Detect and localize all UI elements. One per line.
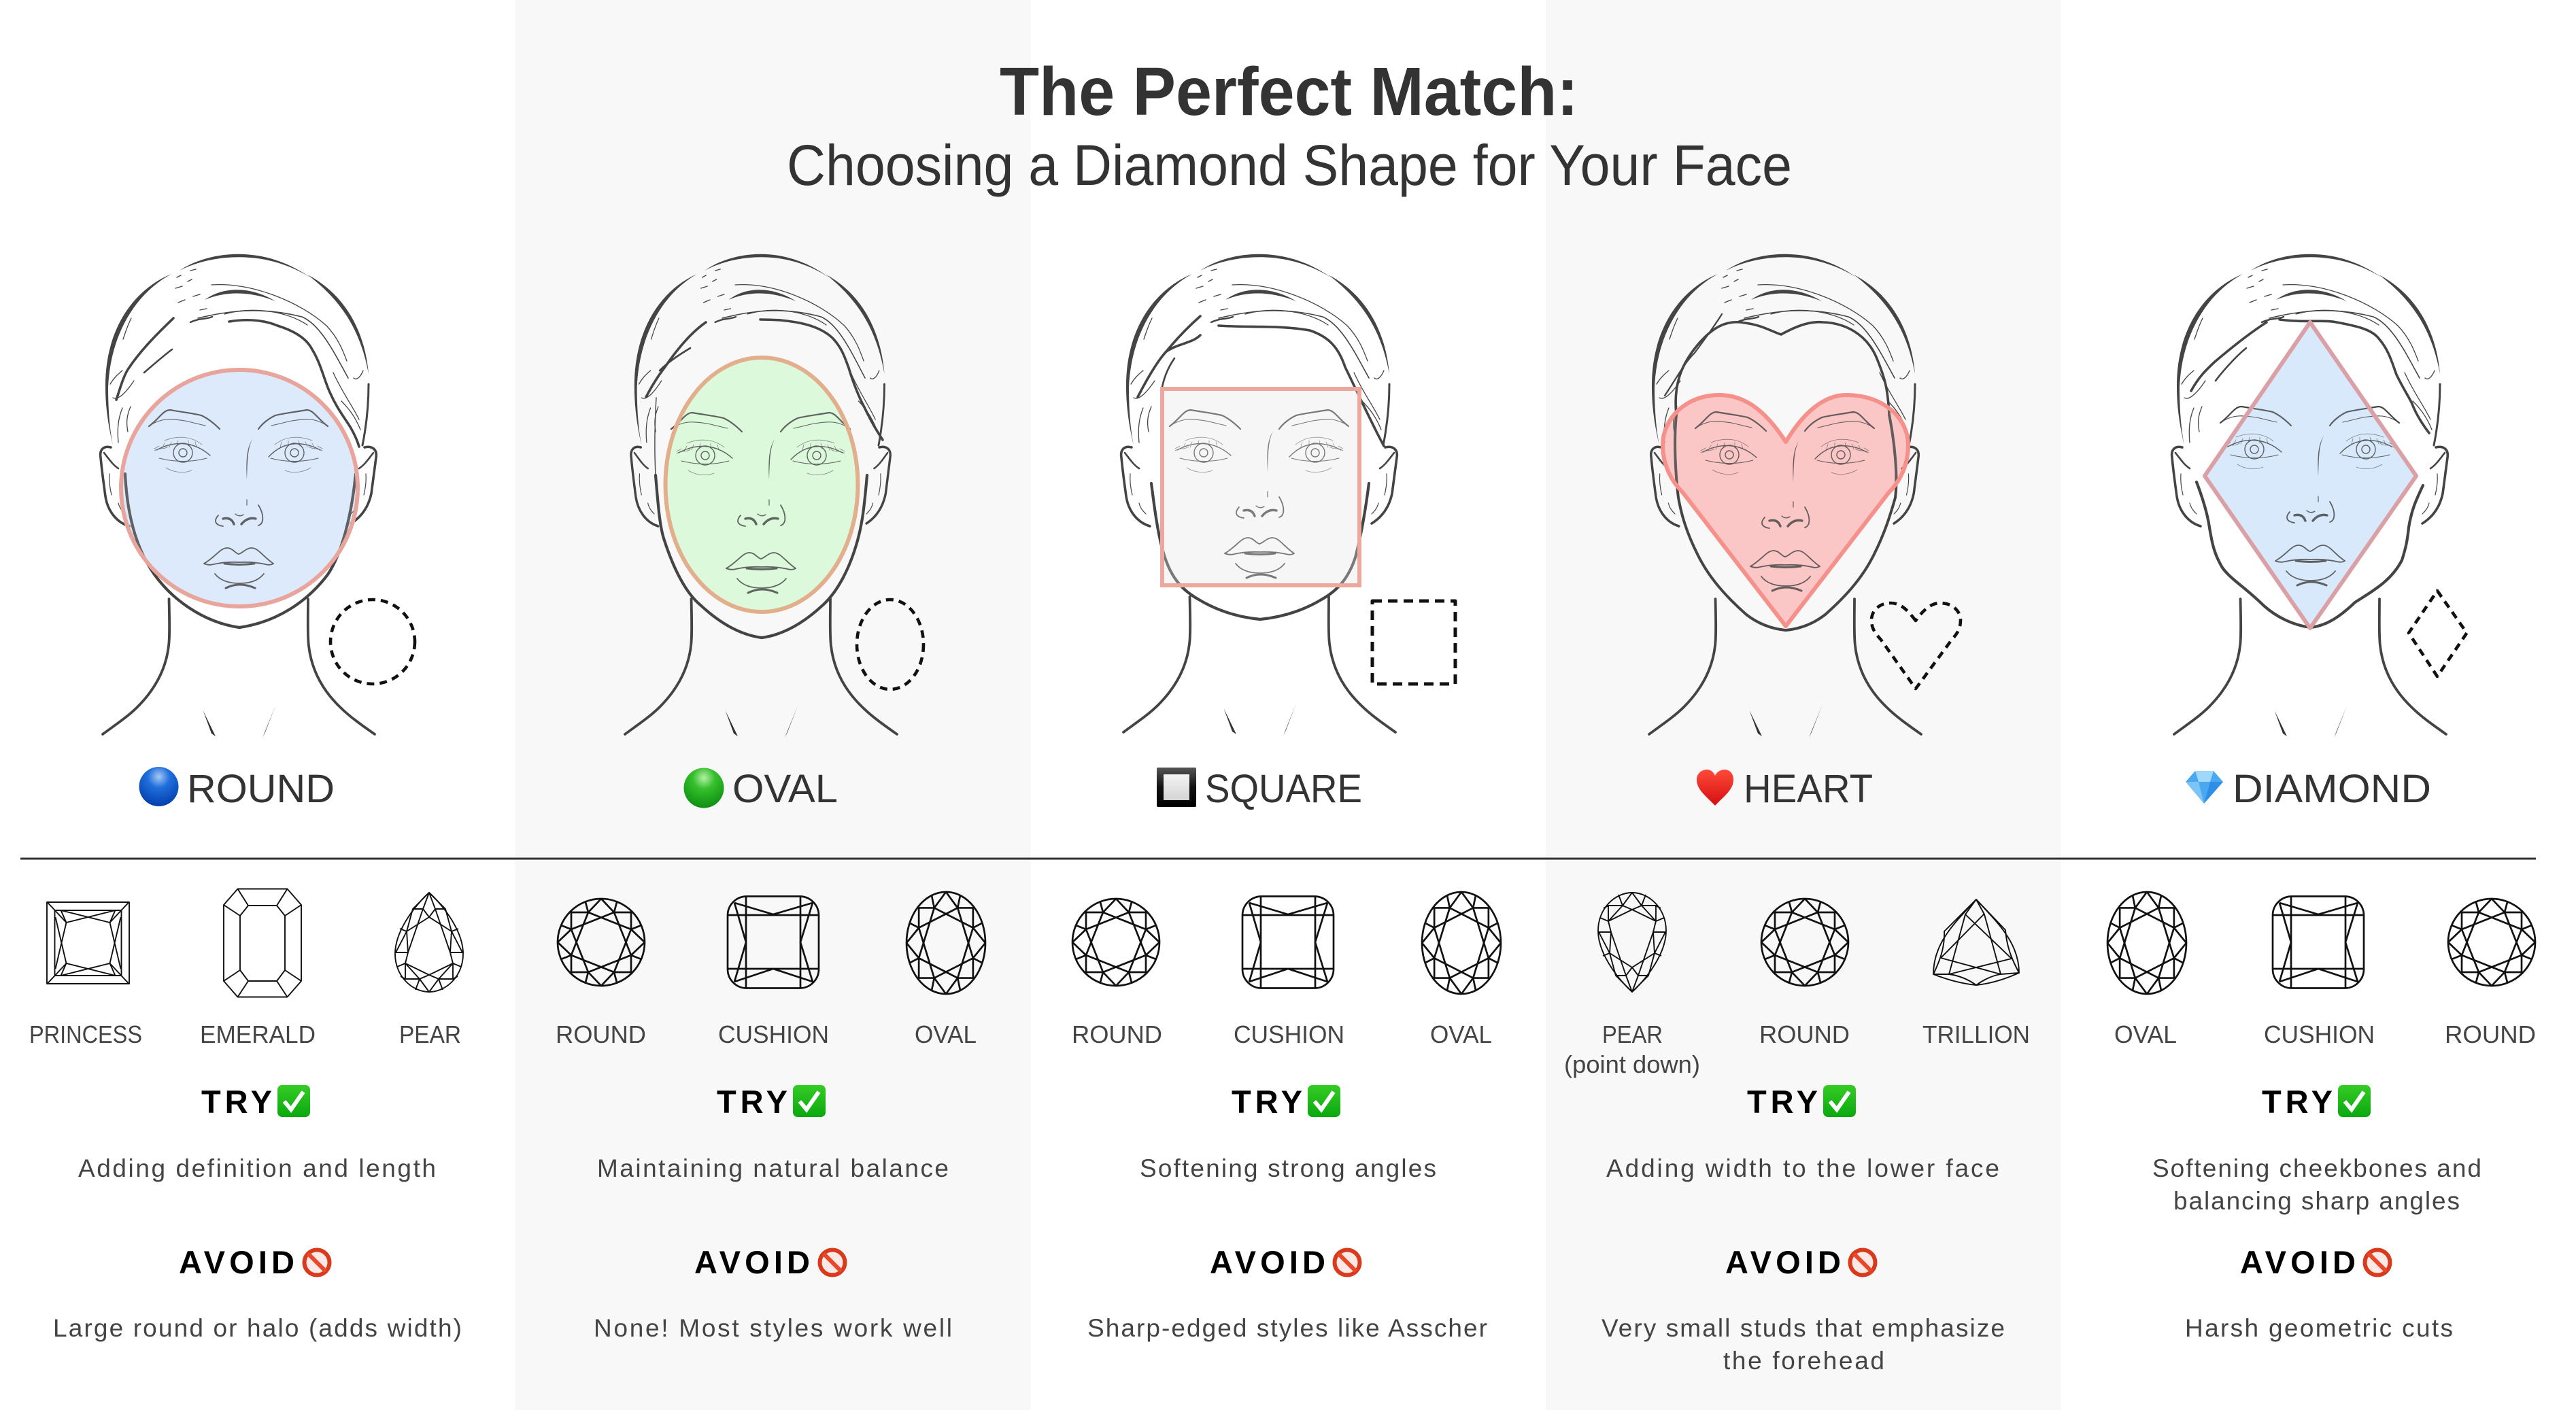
dashed outline: square [1372, 601, 1455, 684]
gem names: OVAL [915, 1020, 977, 1048]
recommendations: diamond [2107, 892, 2536, 1342]
avoid heading: AVOID [694, 1244, 810, 1280]
gem: trillion [1933, 899, 2019, 985]
recommendations: round [29, 889, 463, 1342]
avoid text: Harsh geometric cuts [2185, 1314, 2453, 1342]
gem names: CUSHION [718, 1020, 829, 1048]
gem names [1564, 1020, 2030, 1078]
title [787, 54, 1792, 197]
icon: gem [2186, 771, 2223, 804]
try heading: TRY [1747, 1084, 1818, 1120]
try heading [1747, 1084, 1856, 1120]
gem names: (point down) [1564, 1050, 1700, 1078]
gem: pear [395, 893, 463, 992]
try heading [2262, 1084, 2371, 1120]
label: oval: OVAL [732, 767, 838, 811]
try text: balancing sharp angles [2173, 1187, 2460, 1215]
gem: round [1072, 899, 1159, 986]
icon: red heart [1697, 770, 1733, 806]
panel: oval face [625, 254, 923, 811]
icon: blue circle [139, 767, 178, 806]
gem names: ROUND [1759, 1020, 1850, 1048]
face illustration: square [1121, 254, 1397, 736]
gem names [2114, 1020, 2536, 1048]
try heading: TRY [201, 1084, 272, 1120]
dashed outline: diamond [2409, 591, 2467, 676]
label: square: SQUARE [1205, 767, 1362, 811]
avoid text [1601, 1314, 2005, 1375]
gem names: OVAL [2114, 1020, 2177, 1048]
panel: square face [1121, 254, 1455, 811]
gem: cushion [1242, 896, 1334, 988]
face illustration: oval [625, 254, 897, 738]
avoid text: None! Most styles work well [594, 1314, 952, 1342]
title: The Perfect Match: [1000, 54, 1578, 130]
dashed outline: circle [331, 600, 415, 684]
gem: oval [2107, 892, 2186, 994]
panel: heart face [1649, 254, 1961, 811]
avoid heading: AVOID [2240, 1244, 2356, 1280]
panel: round face [101, 254, 415, 811]
gem names: CUSHION [2264, 1020, 2375, 1048]
try heading [1232, 1084, 1340, 1120]
avoid heading: AVOID [1725, 1244, 1841, 1280]
gem: princess [47, 902, 129, 984]
gem names [556, 1020, 977, 1048]
face illustration: round [101, 254, 376, 738]
gem names: PEAR [399, 1020, 461, 1048]
dashed outline: heart [1871, 603, 1961, 689]
gem: oval [906, 892, 985, 994]
gem: round [558, 899, 645, 986]
try heading [717, 1084, 826, 1120]
try heading: TRY [2262, 1084, 2333, 1120]
try text [2152, 1154, 2481, 1215]
try text: Softening cheekbones and [2152, 1154, 2481, 1182]
gem: round [2448, 899, 2535, 986]
avoid heading: AVOID [1210, 1244, 1325, 1280]
gem names [29, 1020, 461, 1048]
panel: diamond face [2172, 254, 2467, 811]
dashed outline: oval [857, 600, 923, 689]
title: Choosing a Diamond Shape for Your Face [787, 133, 1792, 197]
gem names: ROUND [2445, 1020, 2536, 1048]
gem names [1072, 1020, 1492, 1048]
try text: Maintaining natural balance [597, 1154, 949, 1182]
gem: cushion [728, 896, 819, 988]
try heading: TRY [717, 1084, 787, 1120]
face illustration: heart [1649, 254, 1921, 738]
gem: round [1761, 899, 1848, 986]
avoid heading: AVOID [179, 1244, 294, 1280]
label: diamond: DIAMOND [2233, 767, 2431, 811]
avoid text: Very small studs that emphasize [1601, 1314, 2005, 1342]
gem names: TRILLION [1922, 1020, 2030, 1048]
gem: oval [1422, 892, 1501, 994]
gem names: ROUND [1072, 1020, 1162, 1048]
gem names: PEAR [1602, 1020, 1663, 1048]
recommendations: heart [1564, 893, 2030, 1375]
gem: pear point down [1598, 893, 1666, 992]
gem names: EMERALD [200, 1020, 316, 1048]
recommendations: square [1072, 892, 1501, 1342]
avoid text: Sharp-edged styles like Asscher [1087, 1314, 1487, 1342]
gem names: OVAL [1430, 1020, 1492, 1048]
icon: black square [1157, 768, 1196, 807]
avoid text: Large round or halo (adds width) [53, 1314, 462, 1342]
gem: cushion [2273, 896, 2364, 988]
try text: Adding width to the lower face [1606, 1154, 1999, 1182]
icon: green circle [684, 768, 724, 808]
try heading [201, 1084, 310, 1120]
gem names: CUSHION [1234, 1020, 1344, 1048]
face illustration: diamond [2172, 254, 2447, 738]
label: heart: HEART [1744, 767, 1873, 811]
gem names: PRINCESS [29, 1020, 142, 1048]
gem: emerald [224, 889, 301, 997]
try text: Softening strong angles [1140, 1154, 1436, 1182]
avoid text: the forehead [1723, 1347, 1884, 1375]
gem names: ROUND [556, 1020, 646, 1048]
recommendations: oval [556, 892, 985, 1342]
label: round: ROUND [187, 767, 335, 811]
try text: Adding definition and length [78, 1154, 436, 1182]
try heading: TRY [1232, 1084, 1302, 1120]
